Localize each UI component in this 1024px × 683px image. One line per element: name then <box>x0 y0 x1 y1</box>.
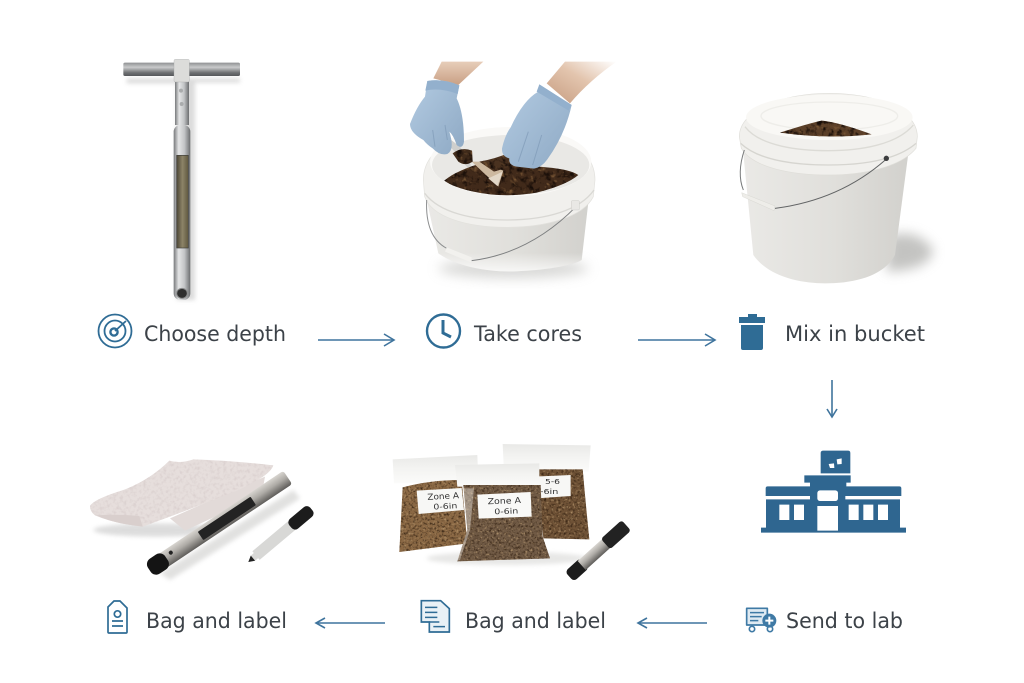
image: labelled soil bags and marker <box>393 444 631 582</box>
label: Take cores: Take cores <box>473 322 582 346</box>
arrow: bag to tools <box>316 618 385 628</box>
bag: back right: -6in <box>540 487 559 496</box>
bag: front: Zone A <box>487 495 521 506</box>
label: Bag and label (documents): Bag and label <box>465 609 606 633</box>
bag: back left <box>393 455 478 552</box>
label: Choose depth: Choose depth <box>144 322 286 346</box>
icon: delivery form <box>747 608 776 632</box>
image: soil probe <box>123 59 240 300</box>
cloth <box>90 459 273 531</box>
icon: laboratory building <box>761 451 906 533</box>
label: Bag and label (tag): Bag and label <box>146 609 287 633</box>
arrow: cores to mix <box>638 334 715 346</box>
probe <box>144 470 293 577</box>
arrow: lab to bag <box>638 618 707 628</box>
icon: documents <box>421 601 449 632</box>
bag: front: 0-6in <box>494 506 519 516</box>
icon: target <box>98 314 132 348</box>
label: Send to lab: Send to lab <box>786 609 903 633</box>
trowel <box>447 140 511 187</box>
bag: back right <box>503 444 591 539</box>
bag: front <box>455 463 550 561</box>
icon: tag <box>108 601 127 633</box>
image: gloved hands taking cores in bucket <box>410 62 617 278</box>
bag: back left: 0-6in <box>433 501 458 512</box>
icon: clock <box>427 314 460 348</box>
image: cloth, probe and marker <box>90 459 315 580</box>
image: bucket with soil <box>739 93 933 283</box>
icon: bin <box>739 314 765 350</box>
arrow: depth to cores <box>318 334 394 346</box>
right glove <box>502 84 572 169</box>
marker <box>565 520 631 582</box>
left glove <box>410 80 464 154</box>
arrow: mix to lab <box>827 380 837 417</box>
marker pen <box>244 504 315 567</box>
label: Mix in bucket: Mix in bucket <box>785 322 925 346</box>
bag: back left: Zone A <box>427 490 460 502</box>
bag: back right: 5-6 <box>545 477 560 486</box>
